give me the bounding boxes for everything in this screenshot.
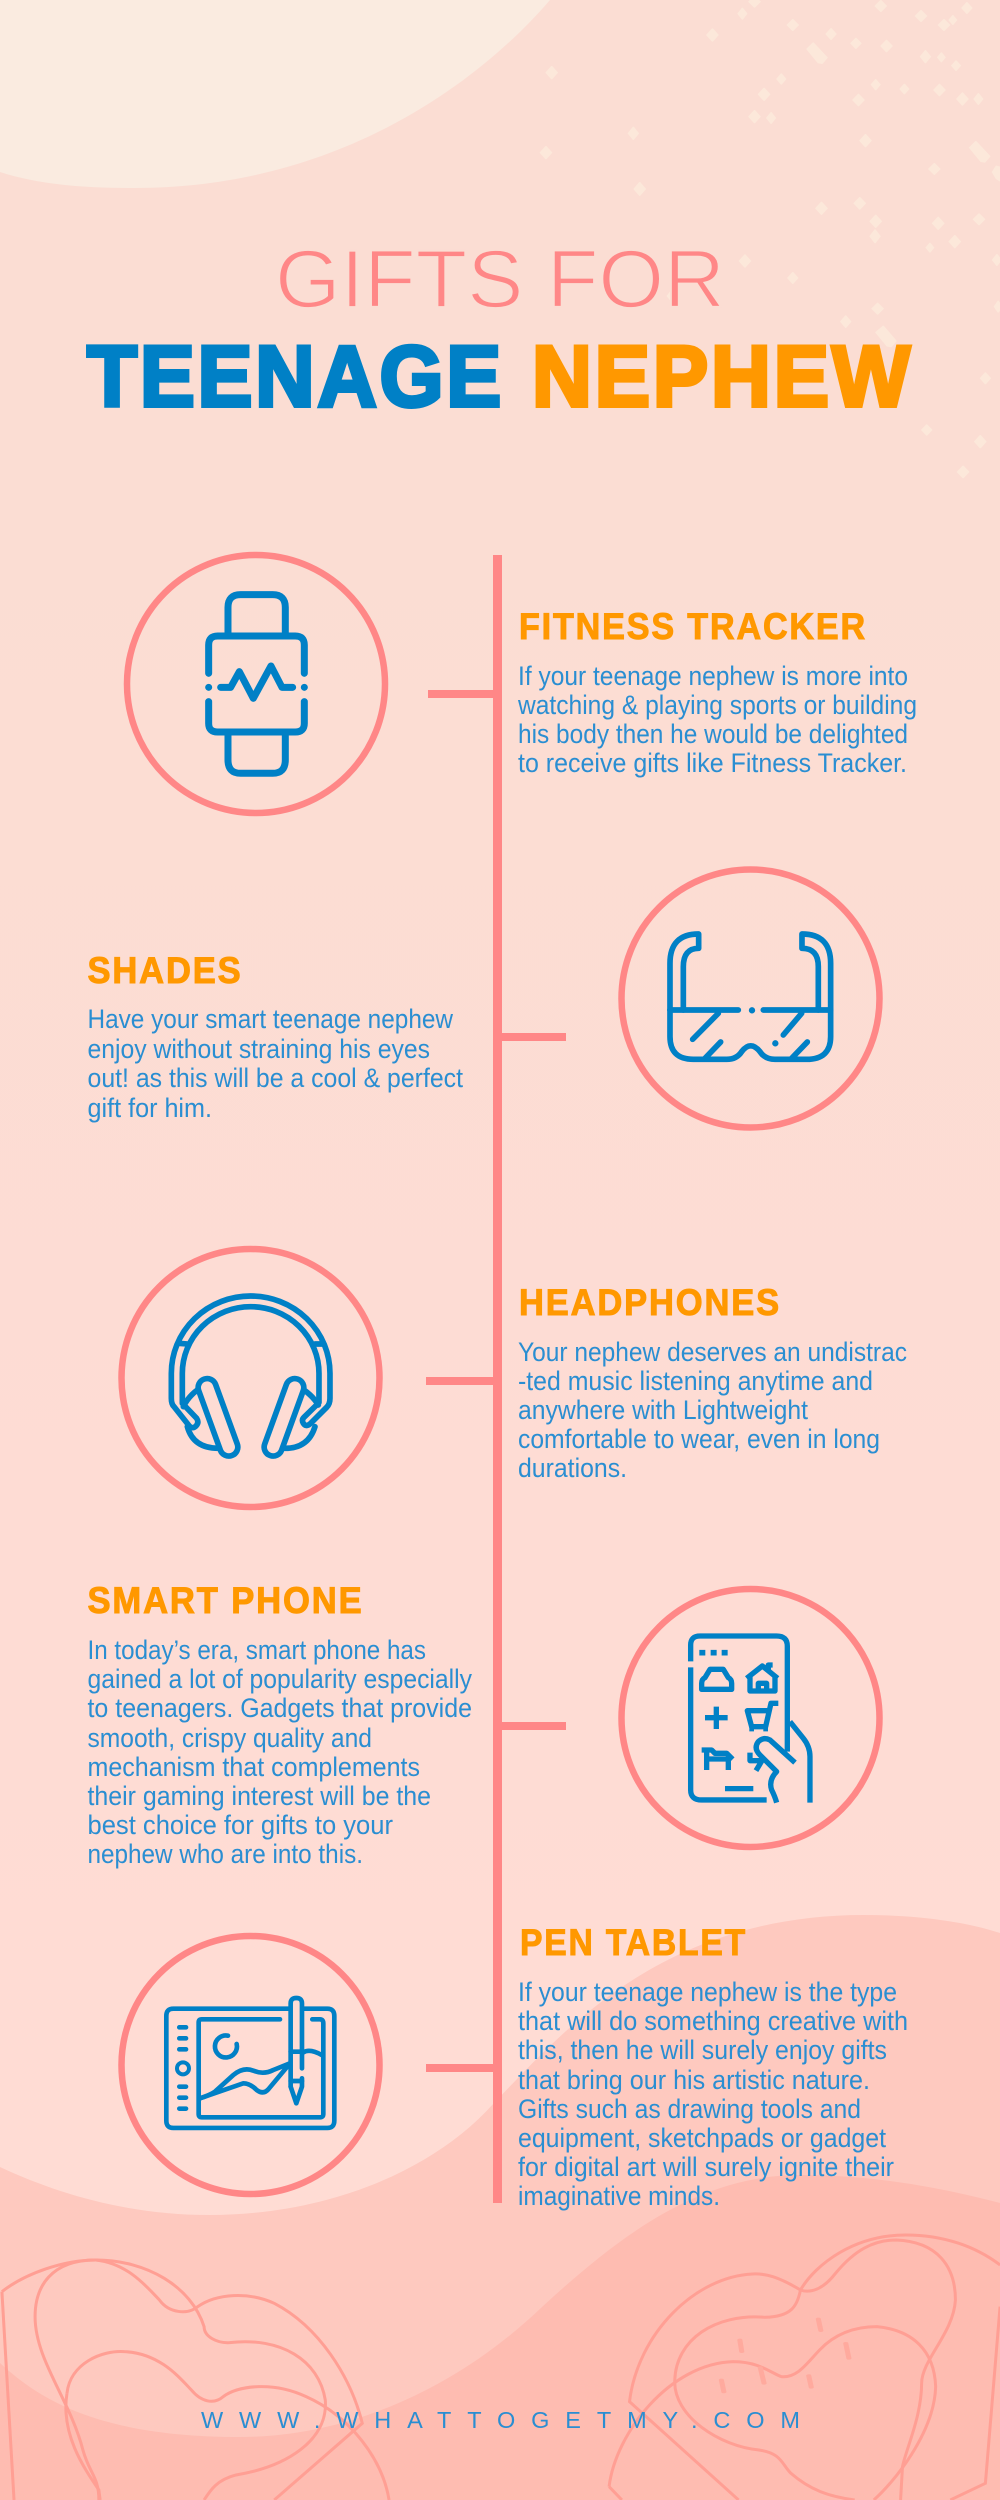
icon ring — [122, 1249, 380, 1507]
panel: shades — [88, 870, 880, 1128]
lower background wave — [0, 1915, 1000, 2500]
heading: FITNESS TRACKER — [519, 605, 867, 647]
title — [87, 234, 913, 425]
timeline vertical line — [493, 555, 502, 2203]
description: Your nephew deserves an undistrac — [518, 1337, 907, 1367]
description: Gifts such as drawing tools and — [518, 2094, 861, 2124]
icon: headphones — [171, 1296, 330, 1459]
description — [517, 661, 917, 778]
description: If your teenage nephew is more into — [518, 661, 908, 691]
speckle pattern top right — [540, 0, 1000, 478]
description: his body then he would be delighted — [518, 719, 908, 749]
icon ring — [622, 870, 880, 1128]
description: gift for him. — [88, 1093, 212, 1123]
description: In today’s era, smart phone has — [88, 1635, 426, 1665]
connector — [426, 1377, 493, 1385]
panel: fitness tracker — [127, 555, 917, 813]
description: anywhere with Lightweight — [518, 1395, 808, 1425]
description: this, then he will surely enjoy gifts — [518, 2035, 887, 2065]
description: that bring our his artistic nature. — [518, 2065, 870, 2095]
connector — [428, 690, 493, 698]
title line 2 accent: NEPHEW — [532, 329, 913, 425]
top-left cream blob — [0, 0, 550, 188]
description: their gaming interest will be the — [88, 1781, 431, 1811]
description: gained a lot of popularity especially — [88, 1664, 472, 1694]
icon ring — [622, 1589, 880, 1847]
description: imaginative minds. — [518, 2181, 720, 2211]
description: durations. — [518, 1453, 627, 1483]
description: -ted music listening anytime and — [518, 1366, 873, 1396]
bottom background wave — [0, 2175, 1000, 2500]
heading: SHADES — [88, 949, 242, 991]
description: for digital art will surely ignite their — [518, 2152, 894, 2182]
description — [518, 1337, 907, 1483]
description — [88, 1635, 472, 1869]
description: comfortable to wear, even in long — [518, 1424, 880, 1454]
description: to receive gifts like Fitness Tracker. — [518, 748, 907, 778]
description: out! as this will be a cool & perfect — [88, 1063, 463, 1093]
panel: pen tablet — [122, 1921, 908, 2211]
icon: pen tablet — [166, 1998, 334, 2128]
title line 1: GIFTS FOR — [275, 234, 725, 325]
description: mechanism that complements — [88, 1752, 420, 1782]
icon: glasses — [670, 934, 831, 1059]
description: to teenagers. Gadgets that provide — [88, 1693, 472, 1723]
icon: fitness watch — [209, 595, 304, 773]
connector — [502, 1033, 566, 1041]
description: watching & playing sports or building — [517, 690, 917, 720]
description: equipment, sketchpads or gadget — [518, 2123, 886, 2153]
description: If your teenage nephew is the type — [518, 1977, 897, 2007]
footer website: WWW.WHATTOGETMY.COM — [201, 2407, 800, 2433]
heading: PEN TABLET — [520, 1921, 747, 1963]
icon ring — [122, 1936, 380, 2194]
heading: SMART PHONE — [88, 1579, 364, 1621]
decorative outlines bottom — [2, 2235, 1000, 2500]
icon: phone with hand — [691, 1636, 810, 1803]
icon ring — [127, 555, 385, 813]
panel: headphones — [122, 1249, 907, 1507]
description — [88, 1004, 463, 1123]
description: that will do something creative with — [518, 2006, 908, 2036]
connector — [502, 1722, 566, 1730]
description: enjoy without straining his eyes — [88, 1034, 430, 1064]
description: Have your smart teenage nephew — [88, 1004, 453, 1034]
connector — [426, 2064, 493, 2072]
description: nephew who are into this. — [88, 1839, 363, 1869]
description: smooth, crispy quality and — [88, 1723, 372, 1753]
description: best choice for gifts to your — [88, 1810, 393, 1840]
description — [518, 1977, 908, 2211]
heading: HEADPHONES — [519, 1281, 781, 1323]
title line 2: TEENAGE — [87, 329, 504, 425]
panel: smart phone — [88, 1579, 880, 1869]
